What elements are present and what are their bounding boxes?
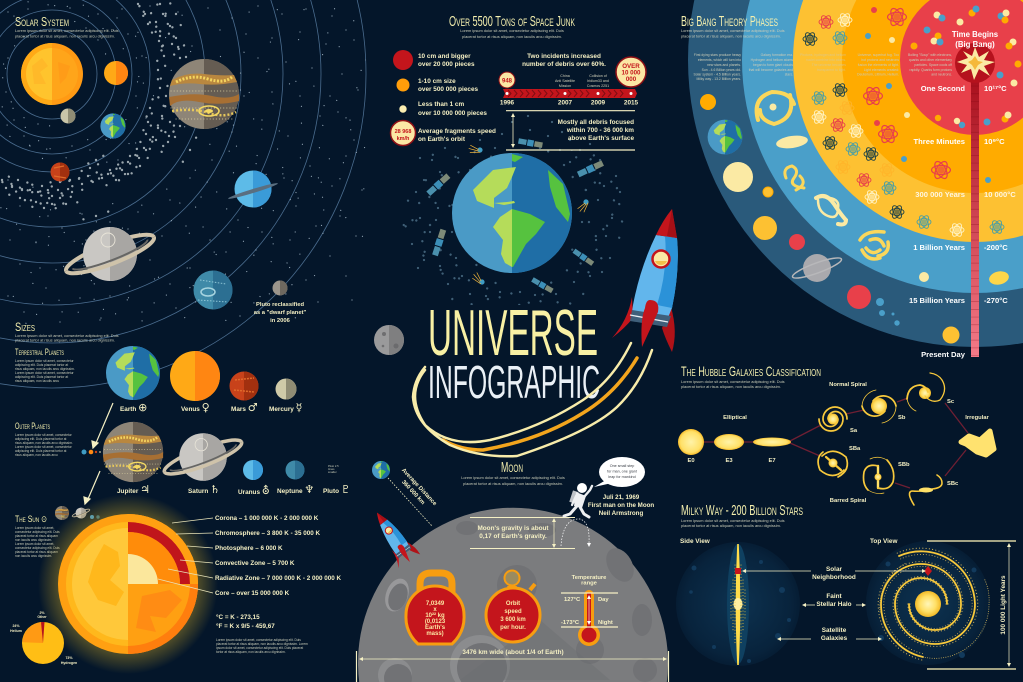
satellites xyxy=(426,138,604,294)
phase descriptions: Light elements created: xyxy=(864,68,899,72)
asteroid belt xyxy=(0,0,202,227)
incident notes: Iridium33 and xyxy=(587,79,609,83)
milky way callouts: Galaxies xyxy=(821,635,848,642)
phase descriptions: fusion the elements of light. xyxy=(858,63,899,67)
sizes text xyxy=(15,333,119,342)
milky way callouts xyxy=(742,566,926,642)
jupiter xyxy=(169,59,239,129)
pie labels xyxy=(10,611,77,665)
distance label: Average Distance xyxy=(400,468,438,508)
phase descriptions: Deuterium, Lithium, Helium. xyxy=(857,72,899,76)
pluto tiny note: Pluto 2.5 xyxy=(328,464,339,468)
big bang intro text xyxy=(681,30,784,38)
hubble labels: Sa xyxy=(850,428,858,434)
temperature formulas: °C = K - 273,15 xyxy=(216,613,260,621)
small terrestrial planets xyxy=(82,450,101,454)
time and temperature labels: Three Minutes xyxy=(914,137,965,146)
milky way callouts: Neighborhood xyxy=(812,574,856,581)
phase descriptions: rapidly. Quarks form protons xyxy=(909,68,952,72)
time and temperature labels: Time Begins xyxy=(952,30,999,39)
incidents text: number of debris over 60%. xyxy=(522,61,606,68)
sun text: placerat tortor at risus aliquam xyxy=(15,534,58,538)
pie labels: 73% xyxy=(65,656,73,660)
stopwatch orbit speed xyxy=(486,570,540,642)
incident notes xyxy=(555,74,609,88)
sun text: placerat tortor at risus aliquam xyxy=(15,550,58,554)
debris size legend: 10 cm and bigger xyxy=(418,53,471,60)
outer labels xyxy=(117,483,351,497)
kettlebell mass: 7,0349 xyxy=(426,601,445,607)
barred spirals xyxy=(818,451,942,505)
sun layer labels: Chromosphere – 3 800 K - 35 000 K xyxy=(215,530,320,537)
badge 948: 948 xyxy=(502,78,513,84)
phase descriptions: Photons, hydrogen and helium xyxy=(800,53,846,57)
sun layer labels: Photosphere – 6 000 K xyxy=(215,545,283,552)
kettlebell mass: 10²² kg xyxy=(425,612,445,619)
sun heading: The Sun ⊙ xyxy=(15,514,47,524)
badge over 10 000 000: 000 xyxy=(626,76,637,83)
kettlebell mass: x xyxy=(433,607,437,613)
thermometer temperature: -173°C xyxy=(561,620,580,626)
hubble labels: Normal Spiral xyxy=(829,382,867,388)
orange ring atoms xyxy=(864,7,991,183)
solar system text: Lorem ipsum dolor sit amet, consectetur adipiscing elit. Duis xyxy=(15,28,119,33)
panel: space junk xyxy=(390,16,647,305)
distance label: 360 000 km xyxy=(400,479,426,506)
pluto note: Pluto reclassified xyxy=(256,302,304,308)
terrestrial labels: Mercury ☿ xyxy=(269,401,302,414)
moon text: placerat tortor at risus aliquam, non iaculis arcu dignissim. xyxy=(463,481,563,486)
rocket trails xyxy=(413,343,652,456)
hubble labels: Elliptical xyxy=(723,415,747,421)
pie labels: Hydrogen xyxy=(61,661,77,665)
outer labels: Saturn ♄ xyxy=(188,483,220,496)
phase descriptions: Sun - 4.6 Billion years old. xyxy=(702,68,741,72)
mars size xyxy=(230,372,258,400)
sun layer labels xyxy=(215,515,341,597)
sun text: Lorem ipsum dolor sit amet, xyxy=(15,526,54,530)
hubble text: Lorem ipsum dolor sit amet, consectetur adipiscing elit. Duis xyxy=(681,379,785,384)
terrestrial labels: Venus ♀ xyxy=(181,401,210,414)
incidents text: Two incidents increased xyxy=(527,53,601,60)
sun layer labels: Radiative Zone – 7 000 000 K - 2 000 000 K xyxy=(215,575,341,582)
debris size legend: over 500 000 pieces xyxy=(418,86,478,93)
hubble labels: SBa xyxy=(849,446,861,452)
phase descriptions: quarks and other elementary xyxy=(909,58,952,62)
temperature formulas xyxy=(216,613,275,630)
outer planets text: Lorem ipsum dolor sit amet, consectetur xyxy=(15,433,73,437)
time and temperature labels: 1 Billion Years xyxy=(913,243,965,252)
armstrong caption: Neil Armstrong xyxy=(599,510,643,517)
terrestrial text xyxy=(15,359,75,383)
big bang explosion xyxy=(955,43,995,83)
normal spirals xyxy=(819,373,945,431)
hubble labels: E0 xyxy=(687,458,695,464)
small outer planets xyxy=(55,506,100,520)
phase descriptions: elements, which will turn into xyxy=(698,58,741,62)
debris size legend: over 10 000 000 pieces xyxy=(418,110,487,117)
milky way callouts: Solar xyxy=(826,566,843,573)
kettlebell mass: Earth's xyxy=(425,625,446,631)
sun text xyxy=(15,526,60,558)
debris size legend xyxy=(393,50,487,117)
gravity box: 0,17 of Earth's gravity. xyxy=(479,533,547,540)
hubble text: placerat tortor at risus aliquam, non iaculis arcu dignissim. xyxy=(681,384,781,389)
hubble labels: SBb xyxy=(898,462,910,468)
sun text: consectetur adipiscing elit. Duis xyxy=(15,546,60,550)
phase descriptions: that will become galaxies and xyxy=(749,68,793,72)
pluto tiny note: smaller xyxy=(328,470,337,474)
thermometer temperature xyxy=(561,575,618,646)
armstrong caption: Juli 21, 1969 xyxy=(603,494,640,501)
outer planets heading: Outer Planets xyxy=(15,421,50,431)
altitude text: within 700 - 36 000 km xyxy=(566,127,634,134)
fragment speed badge xyxy=(390,120,496,146)
terrestrial text: risus aliquam, non iaculis arcu dignissim. xyxy=(15,367,75,371)
hubble labels: E3 xyxy=(725,458,733,464)
moon surface xyxy=(358,508,668,682)
sun note: Lorem ipsum dolor sit amet, consectetur adipiscing elit. Duis xyxy=(216,638,301,642)
terrestrial labels: Mars ♂ xyxy=(231,401,258,414)
time and temperature labels: 300 000 Years xyxy=(915,190,965,199)
time and temperature labels: (Big Bang) xyxy=(955,40,995,49)
time and temperature labels: -200°C xyxy=(984,243,1008,252)
milky way text: placerat tortor at risus aliquam, non iaculis arcu dignissim. xyxy=(681,523,781,528)
milky way callouts: Faint xyxy=(826,593,843,600)
craters xyxy=(378,521,657,682)
thermometer temperature: range xyxy=(581,580,598,586)
tuning fork connectors xyxy=(700,398,968,488)
fragment speed badge: km/h xyxy=(397,136,410,142)
space junk text xyxy=(460,28,564,39)
temperature formulas: °F = K x 9/5 - 459,67 xyxy=(216,622,275,630)
venus size xyxy=(170,351,220,401)
thermometer temperature: Temperature xyxy=(572,575,607,581)
size marker xyxy=(927,541,1016,669)
hubble labels: Barred Spiral xyxy=(830,498,867,504)
gravity box: Moon's gravity is about xyxy=(477,525,549,532)
hubble labels: Sc xyxy=(947,399,955,405)
phase descriptions: Galaxy formation era. xyxy=(761,53,793,57)
phase descriptions: Milky way - 13.2 Billion years. xyxy=(697,77,741,81)
uranus xyxy=(228,170,278,208)
space junk text: Lorem ipsum dolor sit amet, consectetur adipiscing elit. Duis xyxy=(460,28,564,33)
title line two: INFOGRAPHIC xyxy=(428,356,600,408)
light blue ring galaxies xyxy=(757,92,1010,286)
outer labels: Pluto ♇ xyxy=(323,483,351,496)
outer planets text: adipiscing elit. Duis placerat tortor at xyxy=(15,437,66,441)
moon diameter: 3476 km wide (about 1/4 of Earth) xyxy=(462,649,564,656)
panel: the sun xyxy=(10,494,341,674)
milky way text: Lorem ipsum dolor sit amet, consectetur adipiscing elit. Duis xyxy=(681,518,785,523)
phase descriptions: transparent to light. xyxy=(817,68,846,72)
phase descriptions: Solar system - 4.5 Billion years. xyxy=(694,72,741,76)
big bang intro text: Lorem ipsum dolor sit amet, consectetur adipiscing elit. Duis xyxy=(681,28,785,33)
time and temperature labels: 10⁹°C xyxy=(984,137,1005,146)
hubble labels: E7 xyxy=(768,458,776,464)
pluto note: as a "dwarf planet" xyxy=(254,310,307,316)
badge over 10 000 000 xyxy=(616,57,646,87)
outer planets text: adipiscing elit. Duis placerat tortor at xyxy=(15,449,66,453)
stopwatch orbit speed: Orbit xyxy=(506,601,520,607)
terrestrial text: risus aliquam, non iaculis arcu xyxy=(15,379,59,383)
kettlebell mass: (0,0123 xyxy=(425,619,446,625)
pie labels: Other xyxy=(37,615,47,619)
badge over 10 000 000: 10 000 xyxy=(622,70,641,76)
solar system text xyxy=(15,28,119,38)
fragment speed badge: Average fragments speed xyxy=(418,128,496,135)
pie labels: 2% xyxy=(39,611,45,615)
moon text xyxy=(461,475,565,486)
sun cross section xyxy=(58,514,198,654)
pie labels: 24% xyxy=(12,624,20,628)
red core particles xyxy=(910,6,1022,128)
sizes text: placerat tortor at risus aliquam, non iaculis arcu dignissim. xyxy=(15,338,115,342)
panel: big bang theory phases xyxy=(681,0,1023,359)
fragment speed badge: 28 968 xyxy=(395,129,411,135)
terrestrial text: adipiscing elit. Duis placerat tortor at xyxy=(15,375,68,379)
outer labels: Jupiter ♃ xyxy=(117,483,150,496)
orbits xyxy=(0,0,366,388)
terrestrial text: Lorem ipsum dolor sit amet, consectetur xyxy=(15,359,75,363)
panel: sizes xyxy=(15,320,351,520)
altitude text xyxy=(558,119,634,142)
debris size legend: Less than 1 cm xyxy=(418,101,464,108)
debris size legend: over 20 000 pieces xyxy=(418,61,475,68)
incident notes: Anti Satellite xyxy=(555,79,575,83)
sun xyxy=(21,43,83,105)
outer planets text: risus aliquam, non iaculis arcu dignissim. xyxy=(15,441,73,445)
uranus size xyxy=(243,460,263,480)
saturn size xyxy=(161,433,245,481)
sun text: Lorem ipsum dolor sit amet, xyxy=(15,542,54,546)
hubble labels: Sb xyxy=(898,415,906,421)
incident notes: China xyxy=(560,74,570,78)
distance arrow xyxy=(388,478,432,526)
neptune xyxy=(194,270,232,310)
panel: moon xyxy=(356,457,668,682)
earth small xyxy=(372,461,390,479)
phase descriptions: began to form giant clouds xyxy=(753,63,793,67)
debris timeline: 1996 xyxy=(500,100,515,106)
pluto xyxy=(272,280,288,296)
big bang intro text: placerat tortor at risus aliquam, non iaculis arcu dignissim. xyxy=(681,34,781,38)
phase descriptions: Hydrogen and helium atoms xyxy=(751,58,793,62)
pluto note xyxy=(254,302,307,324)
outer planets text: risus aliquam, non iaculis arcu xyxy=(15,453,58,457)
moon diameter xyxy=(356,649,668,682)
earth xyxy=(100,113,126,139)
hubble labels xyxy=(687,382,989,504)
thermometer temperature: Day xyxy=(598,597,609,603)
gravity box xyxy=(470,518,591,548)
terrestrial labels xyxy=(120,401,302,414)
pluto tiny note: times xyxy=(328,467,335,471)
timeline bar xyxy=(971,78,979,357)
debris size legend: 1-10 cm size xyxy=(418,78,456,85)
earth main xyxy=(452,153,572,273)
badge 948 xyxy=(499,72,515,88)
debris timeline: 2009 xyxy=(591,100,606,106)
panel: solar system xyxy=(0,0,366,388)
hubble heading: The Hubble Galaxies Classification xyxy=(681,363,821,379)
phase descriptions: hot protons and neutrons xyxy=(861,58,899,62)
debris timeline xyxy=(500,89,639,106)
astronaut xyxy=(564,483,592,517)
kettlebell mass xyxy=(406,573,464,644)
solar system text: placerat tortor at risus aliquam, non iaculis arcu dignissim. xyxy=(15,34,115,38)
moon heading: Moon xyxy=(501,459,523,476)
incident notes: Mission xyxy=(559,84,571,88)
small moon xyxy=(374,325,404,355)
solar system heading: Solar System xyxy=(15,14,69,29)
sizes text: Lorem ipsum dolor sit amet, consectetur adipiscing elit. Duis xyxy=(15,333,119,338)
debris timeline: 2007 xyxy=(558,100,573,106)
sun text: non iaculis arcu dignissim. xyxy=(15,554,52,558)
side view galaxy xyxy=(676,542,800,666)
pie labels: Helium xyxy=(10,629,22,633)
kettlebell mass: mass) xyxy=(426,631,444,637)
time and temperature labels: 10 000°C xyxy=(984,190,1016,199)
sun note: tortor at risus aliquam, non iaculis arcu dignissim. xyxy=(216,650,286,654)
altitude text: Mostly all debris focused xyxy=(558,119,634,126)
sun glow xyxy=(38,494,218,674)
stopwatch orbit speed: per hour. xyxy=(500,625,526,631)
milky way callouts: Satellite xyxy=(822,627,847,634)
panel: main title xyxy=(374,209,678,456)
pluto note: in 2006 xyxy=(270,318,291,324)
sun layer leader lines xyxy=(158,518,213,593)
phase descriptions: and neutrons. xyxy=(931,72,952,76)
composition pie chart xyxy=(22,621,64,664)
thermometer temperature: Night xyxy=(598,620,613,626)
title line one: UNIVERSE xyxy=(428,296,598,369)
phase descriptions: First dying stars produce heavy xyxy=(694,53,741,57)
phase descriptions: Boiling "Soup" with electrons, xyxy=(908,53,952,57)
yellow ring atoms xyxy=(803,12,1004,238)
outer labels: Neptune ♆ xyxy=(277,483,314,496)
panel: hubble classification xyxy=(678,363,994,505)
sun note: ipsum dolor sit amet, consectetur adipiscing elit. Duis placerat xyxy=(216,646,303,650)
mercury xyxy=(60,108,76,124)
big bang heading: Big Bang Theory Phases xyxy=(681,13,778,30)
rocket large xyxy=(612,209,678,352)
outer planets text xyxy=(15,433,73,457)
debris timeline: 2015 xyxy=(624,100,639,106)
time and temperature labels xyxy=(909,30,1016,359)
top view galaxy xyxy=(866,541,990,665)
arrow: outer to small xyxy=(84,471,100,504)
top view label: Top View xyxy=(870,538,897,545)
incidents text xyxy=(522,53,606,68)
time and temperature labels: 15 Billion Years xyxy=(909,296,965,305)
elliptical galaxies xyxy=(678,429,791,455)
rocket small xyxy=(359,511,422,572)
earth size xyxy=(106,346,160,400)
time and temperature labels: One Second xyxy=(921,84,965,93)
time and temperature labels: -270°C xyxy=(984,296,1008,305)
stopwatch orbit speed: speed xyxy=(504,609,522,615)
phase descriptions: stars. xyxy=(785,72,793,76)
background stars xyxy=(0,1,366,324)
phase descriptions xyxy=(694,53,952,81)
incident notes: Cosmos 2251 xyxy=(587,84,609,88)
thermometer temperature: 127°C xyxy=(564,597,581,603)
saturn xyxy=(63,227,157,281)
terrestrial heading: Terrestrial Planets xyxy=(15,347,64,357)
hubble labels: SBc xyxy=(947,481,959,487)
time and temperature labels: Present Day xyxy=(921,350,966,359)
sun note xyxy=(216,638,308,654)
sun layer labels: Core – over 15 000 000 K xyxy=(215,590,290,597)
panel: milky way xyxy=(676,502,1016,669)
milky way heading: Milky Way - 200 Billion Stars xyxy=(681,502,803,519)
sun note: placerat tortor at risus aliquam, non iaculis arcu dignissim. Lorem xyxy=(216,642,308,646)
debris dots xyxy=(402,115,624,305)
mars xyxy=(50,162,70,182)
phase descriptions: new stars and planets. xyxy=(707,63,741,67)
space junk heading: Over 5500 Tons of Space Junk xyxy=(449,13,575,30)
phase descriptions: The universe becomes xyxy=(812,63,846,67)
sun text: non iaculis arcu dignissim. xyxy=(15,538,52,542)
milky way text xyxy=(681,518,785,528)
stopwatch orbit speed: 3 600 km xyxy=(500,617,526,623)
pluto tiny note xyxy=(328,464,339,474)
phase descriptions: particles. Space cools off xyxy=(914,63,952,67)
sizes heading: Sizes xyxy=(15,320,35,334)
terrestrial labels: Earth ⊕ xyxy=(120,401,147,414)
hubble text xyxy=(681,379,785,389)
side view label: Side View xyxy=(680,538,710,545)
sun layer labels: Convective Zone – 5 700 K xyxy=(215,560,295,567)
milky way callouts: Stellar Halo xyxy=(816,601,852,608)
sun text: consectetur adipiscing elit. Duis xyxy=(15,530,60,534)
sun layer labels: Corona – 1 000 000 K - 2 000 000 K xyxy=(215,515,319,522)
incident notes: Collision of xyxy=(589,74,607,78)
terrestrial text: adipiscing elit. Duis placerat tortor at xyxy=(15,363,68,367)
speech bubble xyxy=(594,457,645,487)
altitude range marker xyxy=(506,111,635,150)
altitude text: above Earth's surface xyxy=(568,135,634,142)
moon text: Lorem ipsum dolor sit amet, consectetur adipiscing elit. Duis xyxy=(461,475,565,480)
speech bubble: leap for mankind xyxy=(608,475,636,479)
phase descriptions: nuclei combine into atoms. xyxy=(806,58,846,62)
arrow: earth to outer xyxy=(92,403,113,448)
fragment speed badge: on Earth's orbit xyxy=(418,136,466,143)
neptune size xyxy=(286,460,304,480)
outer planets text: Lorem ipsum dolor sit amet, consectetur xyxy=(15,445,73,449)
terrestrial text: Lorem ipsum dolor sit amet, consectetur xyxy=(15,371,75,375)
big bang rings xyxy=(688,0,1023,347)
phase descriptions: Universe, superhot fog. Too xyxy=(858,53,899,57)
armstrong caption xyxy=(588,494,654,517)
speech bubble: for man, one giant xyxy=(607,470,637,474)
armstrong caption: First man on the Moon xyxy=(588,502,654,509)
outer labels: Uranus ⛢ xyxy=(238,484,270,497)
time and temperature labels: 10¹⁷°C xyxy=(984,84,1007,93)
venus xyxy=(104,61,128,85)
irregular galaxy xyxy=(961,431,994,455)
space junk text: placerat tortor at risus aliquam, non iaculis arcu dignissim. xyxy=(462,34,562,39)
mercury size xyxy=(276,378,296,400)
badge over 10 000 000: OVER xyxy=(622,63,640,70)
speech bubble: One small step xyxy=(610,464,634,468)
hubble labels: Irregular xyxy=(965,415,989,421)
jupiter size xyxy=(103,422,163,482)
size marker: 100 000 Light Years xyxy=(1000,575,1007,635)
dark ring objects xyxy=(700,94,960,344)
